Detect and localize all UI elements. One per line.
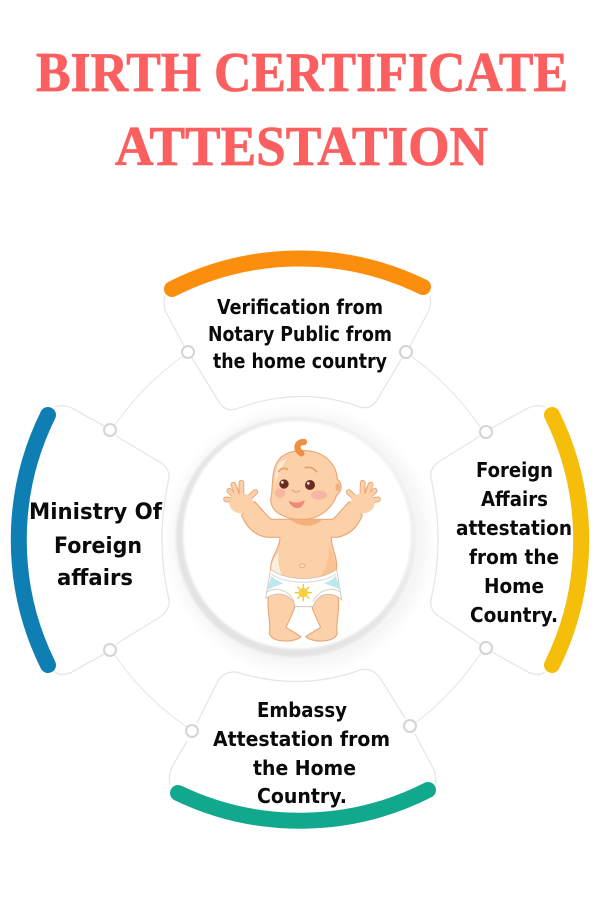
icon: baby: [226, 442, 378, 641]
left text: [29, 499, 162, 591]
top text: [208, 295, 392, 373]
panel: embassy attestation: [169, 669, 436, 821]
bottom text: Country.: [257, 784, 347, 808]
baby arms and hands: [226, 483, 378, 537]
central ring: [172, 412, 428, 668]
left accent arc: [19, 415, 48, 665]
right text: [456, 458, 572, 627]
title: [36, 42, 568, 178]
connector nodes: [104, 346, 492, 737]
left text: Ministry Of: [29, 499, 162, 525]
panel: foreign affairs attestation: [431, 406, 581, 674]
right text: Country.: [470, 603, 558, 627]
panel outline top: [164, 296, 431, 410]
right text: Affairs: [481, 487, 548, 511]
baby torso: [271, 519, 337, 583]
top text: Verification from: [217, 295, 383, 319]
baby diaper: [266, 569, 342, 607]
title: ATTESTATION: [115, 116, 488, 178]
bottom accent arc: [178, 790, 428, 821]
panel outline left: [55, 406, 169, 674]
panel outline right: [431, 406, 545, 674]
title: BIRTH CERTIFICATE: [36, 42, 568, 104]
left text: affairs: [57, 565, 133, 591]
bottom text: [213, 698, 390, 808]
bottom text: the Home: [253, 756, 356, 780]
sun emblem: [295, 585, 311, 601]
top accent arc: [172, 259, 423, 289]
right text: from the: [469, 545, 559, 569]
panel: ministry of foreign affairs: [19, 406, 169, 674]
panel outline bottom: [169, 669, 436, 785]
panel: notary verification: [164, 259, 431, 410]
right text: attestation: [456, 516, 572, 540]
right accent arc: [552, 415, 581, 665]
right text: Home: [484, 574, 544, 598]
baby head: [271, 442, 341, 519]
top text: Notary Public from: [208, 322, 392, 346]
bottom text: Embassy: [257, 698, 347, 722]
baby legs: [268, 593, 339, 641]
connector arcs between panels: [115, 356, 481, 727]
right text: Foreign: [476, 458, 553, 482]
left text: Foreign: [54, 533, 142, 559]
bottom text: Attestation from: [213, 727, 390, 751]
top text: the home country: [213, 349, 387, 373]
